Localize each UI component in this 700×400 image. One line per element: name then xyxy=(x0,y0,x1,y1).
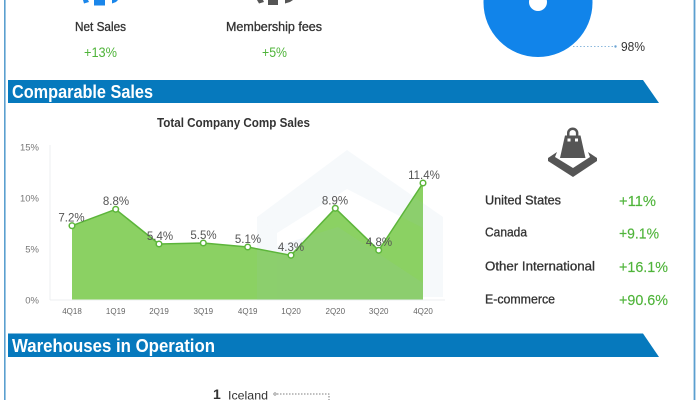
area chart: total company comp sales: 8.9% xyxy=(322,196,348,208)
row: other international xyxy=(485,259,668,276)
area chart: total company comp sales xyxy=(20,142,445,316)
stat: net sales xyxy=(75,20,126,60)
area chart: total company comp sales: 2Q19 xyxy=(149,307,169,316)
heading: comparable sales xyxy=(8,80,659,103)
heading: warehouses in operation: Warehouses in Operation xyxy=(12,336,215,356)
area chart: total company comp sales: 1Q19 xyxy=(106,307,126,316)
stat: net sales: Net Sales xyxy=(75,20,126,34)
icon: shopping bag on tray xyxy=(548,127,597,177)
area chart: total company comp sales: 7.2% xyxy=(58,212,85,224)
row: canada xyxy=(485,226,659,242)
area chart: total company comp sales: 4.8% xyxy=(366,237,392,249)
row: other international: +16.1% xyxy=(619,259,668,276)
row: other international: Other International xyxy=(485,260,595,274)
area chart: total company comp sales: 0% xyxy=(25,296,40,306)
row: united states xyxy=(485,193,656,210)
watermark logo xyxy=(257,150,443,300)
area chart: total company comp sales: 11.4% xyxy=(408,170,440,182)
stat: net sales: +13% xyxy=(84,44,117,60)
area chart: total company comp sales: 8.8% xyxy=(103,196,129,208)
donut chart xyxy=(484,0,645,57)
regional comps list xyxy=(485,193,668,309)
stat: membership fees: +5% xyxy=(262,44,287,60)
row: canada: Canada xyxy=(485,226,527,240)
area chart: total company comp sales: 5% xyxy=(25,244,40,256)
area chart: total company comp sales: 1Q20 xyxy=(281,307,301,316)
stat: membership fees xyxy=(226,20,322,60)
area chart: total company comp sales: 3Q20 xyxy=(369,307,389,316)
stat: membership fees: Membership fees xyxy=(226,20,322,34)
icon: membership fees (cropped) xyxy=(257,0,293,5)
row: united states: +11% xyxy=(619,193,656,210)
icon: net sales (cropped) xyxy=(83,0,118,6)
area chart: total company comp sales: 5.4% xyxy=(147,231,173,243)
row: e-commerce: +90.6% xyxy=(619,292,668,309)
area chart: total company comp sales: 5.1% xyxy=(235,234,261,246)
area chart: total company comp sales: 4Q20 xyxy=(413,307,433,316)
heading: comparable sales: Comparable Sales xyxy=(12,82,153,102)
area chart: total company comp sales: 10% xyxy=(20,194,40,204)
row: e-commerce: E-commerce xyxy=(485,292,555,306)
heading: warehouses in operation xyxy=(8,334,659,357)
area chart: total company comp sales: 15% xyxy=(20,142,40,154)
area chart: total company comp sales: 4Q18 xyxy=(62,307,82,316)
area chart: total company comp sales: 4Q19 xyxy=(238,307,258,316)
row: e-commerce xyxy=(485,292,668,309)
map callout: iceland xyxy=(213,386,329,400)
area chart: total company comp sales: 4.3% xyxy=(278,242,304,254)
area chart: total company comp sales: 3Q19 xyxy=(194,307,214,316)
area chart: total company comp sales: 2Q20 xyxy=(326,307,346,316)
chart title: Total Company Comp Sales xyxy=(157,116,310,130)
row: canada: +9.1% xyxy=(619,226,659,242)
donut chart: 98% xyxy=(621,39,645,54)
row: united states: United States xyxy=(485,194,561,208)
area chart: total company comp sales: 5.5% xyxy=(190,230,217,242)
